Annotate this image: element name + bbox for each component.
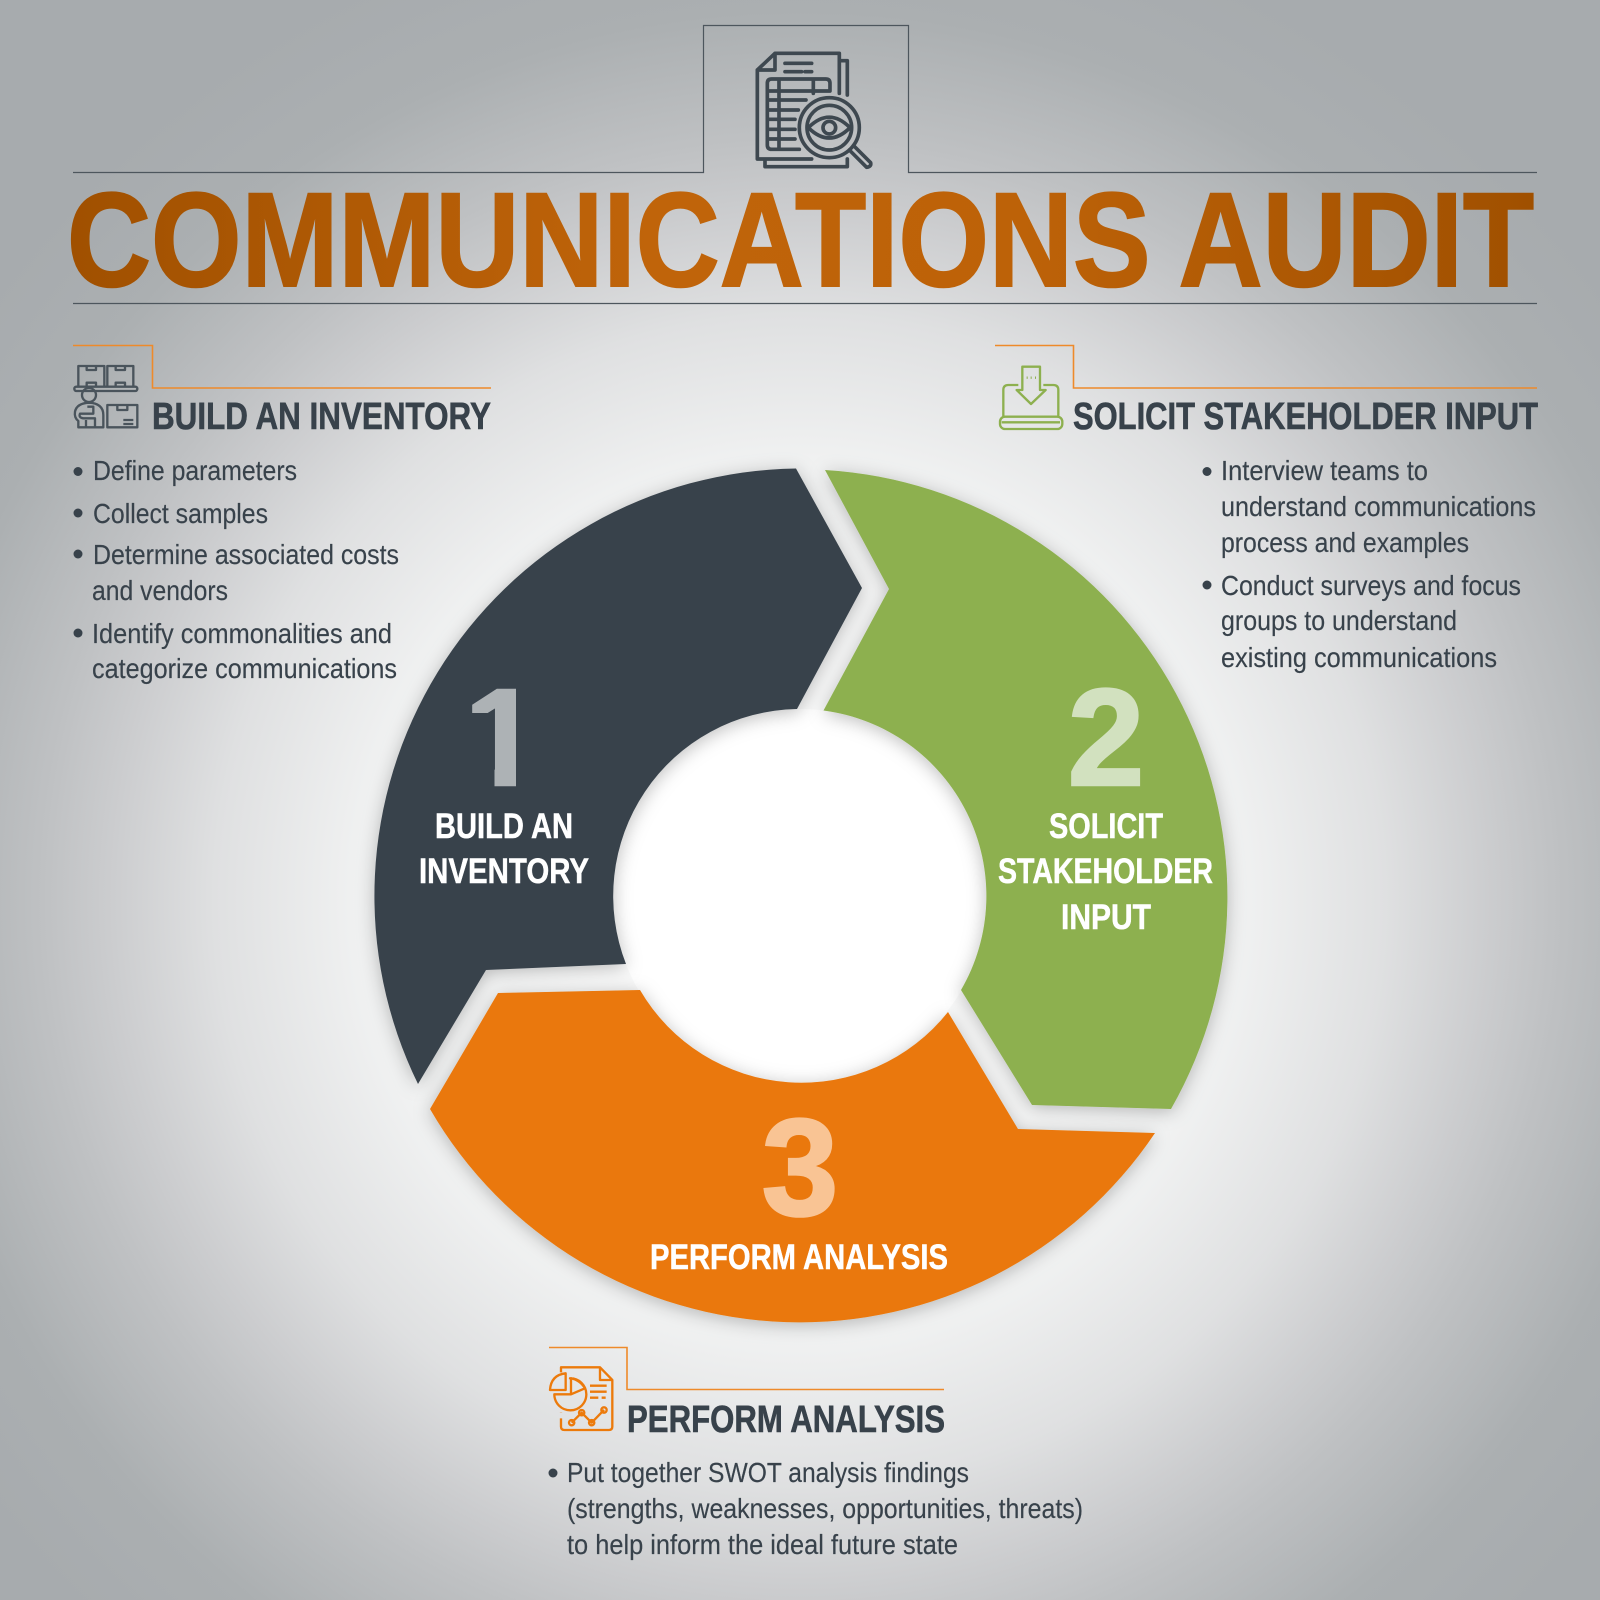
number 2: 2: [1068, 661, 1144, 815]
segment 2: solicit stakeholder input: STAKEHOLDER: [998, 851, 1213, 891]
segment 3: perform analysis: [430, 990, 1155, 1322]
number 1: 1: [464, 661, 541, 815]
heading: BUILD AN INVENTORY: [152, 396, 491, 438]
panel: build an inventory: [73, 346, 491, 684]
bullet list: [548, 1457, 1083, 1560]
bullet list: categorize communications: [92, 653, 397, 684]
center circle: [613, 709, 987, 1083]
header frame: [73, 26, 1537, 304]
segment 1: build an inventory: [374, 468, 862, 1084]
bullet list: Interview teams to: [1221, 455, 1428, 486]
cycle diagram: [374, 468, 1227, 1322]
bullet list: Identify commonalities and: [92, 618, 392, 649]
panel: solicit stakeholder input: [995, 346, 1538, 673]
bullet list: groups to understand: [1221, 605, 1457, 636]
icon: report with charts: [550, 1367, 612, 1430]
panel: perform analysis: [548, 1348, 1083, 1560]
bullet list: existing communications: [1221, 642, 1497, 673]
heading: PERFORM ANALYSIS: [627, 1399, 945, 1441]
icon: warehouse worker with boxes: [74, 366, 137, 427]
label: BUILD AN: [435, 806, 573, 846]
bullet list: [74, 455, 399, 684]
bullet list: and vendors: [92, 575, 228, 606]
icon: laptop with download arrow: [1000, 367, 1062, 429]
bullet list: Put together SWOT analysis findings: [567, 1457, 969, 1488]
bullet list: understand communications: [1221, 491, 1536, 522]
number 3: 3: [762, 1091, 838, 1245]
segment 1: build an inventory: INVENTORY: [419, 851, 589, 891]
icon: document audit with magnifier: [757, 53, 871, 167]
bullet list: Determine associated costs: [93, 539, 399, 570]
segment 2: solicit stakeholder input: INPUT: [1061, 897, 1151, 937]
label: SOLICIT: [1049, 806, 1163, 846]
segment 2: solicit stakeholder input: [824, 470, 1227, 1109]
bullet list: Define parameters: [93, 455, 297, 486]
bullet list: to help inform the ideal future state: [567, 1529, 958, 1560]
bullet list: Conduct surveys and focus: [1221, 570, 1521, 601]
bullet list: (strengths, weaknesses, opportunities, threats): [567, 1493, 1083, 1524]
bullet list: [1202, 455, 1536, 673]
bullet list: Collect samples: [93, 498, 268, 529]
bullet list: process and examples: [1221, 527, 1469, 558]
label: PERFORM ANALYSIS: [650, 1237, 948, 1277]
